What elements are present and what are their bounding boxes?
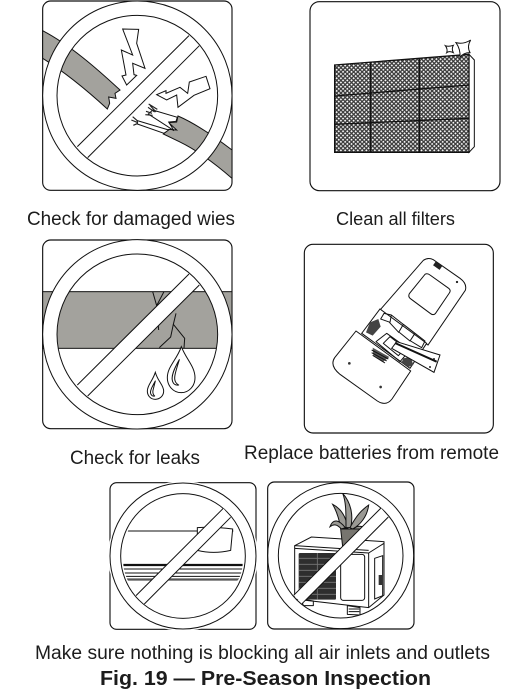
panel: outdoor unit blocked bbox=[268, 482, 414, 629]
remote screen bbox=[409, 274, 450, 315]
remote body bbox=[380, 258, 466, 345]
icon: small sparkle bbox=[445, 45, 453, 53]
no-entry ring bbox=[268, 483, 414, 629]
side valve panel bbox=[375, 556, 383, 599]
panel: clean filters bbox=[310, 2, 500, 191]
filter side bbox=[469, 54, 474, 152]
battery bay bbox=[362, 309, 427, 368]
no-entry ring bbox=[43, 240, 232, 429]
no-entry ring bbox=[110, 483, 256, 629]
wire, right section bbox=[163, 116, 232, 178]
label: clean filters: Clean all filters bbox=[336, 208, 455, 229]
icon: potted plant bbox=[330, 493, 369, 547]
label: damaged wires: Check for damaged wies bbox=[27, 209, 235, 230]
battery cover bbox=[333, 331, 411, 403]
cloth on unit bbox=[197, 527, 233, 552]
label: remote batteries: Replace batteries from remote bbox=[244, 443, 499, 464]
slash bbox=[294, 508, 388, 604]
indoor unit bbox=[123, 531, 243, 581]
icon: lightning bolt 2 bbox=[157, 76, 210, 107]
grey pipe band bbox=[43, 292, 232, 348]
label: leaks: Check for leaks bbox=[70, 448, 200, 469]
icon: small drop bbox=[147, 372, 164, 399]
icon: frayed wire strands bbox=[131, 104, 177, 133]
slash bbox=[136, 508, 231, 604]
panel: leaks bbox=[43, 240, 232, 429]
crack bbox=[153, 292, 185, 348]
filter frame lines bbox=[335, 58, 469, 152]
figure caption: Fig. 19 — Pre-Season Inspection bbox=[100, 668, 431, 690]
slash bbox=[77, 274, 199, 396]
filter mesh bbox=[335, 54, 469, 152]
panel: damaged wires bbox=[43, 1, 232, 190]
icon: lightning bolt 1 bbox=[121, 29, 145, 85]
wire, left section bbox=[43, 31, 120, 109]
outdoor unit bbox=[295, 537, 384, 615]
no-entry ring bbox=[43, 1, 232, 190]
panel: remote batteries bbox=[304, 244, 493, 433]
icon: battery bbox=[392, 342, 440, 372]
feet bbox=[301, 599, 360, 615]
access panel bbox=[341, 554, 365, 600]
panel: indoor unit blocked bbox=[110, 483, 256, 629]
label: inlets and outlets: Make sure nothing is blocking all air inlets and outlets bbox=[35, 643, 490, 664]
icon: emitter bbox=[433, 261, 442, 270]
slash bbox=[77, 36, 199, 158]
icon: large drop bbox=[167, 347, 195, 393]
icon: large sparkle bbox=[456, 40, 471, 57]
condenser coil bbox=[299, 553, 336, 600]
